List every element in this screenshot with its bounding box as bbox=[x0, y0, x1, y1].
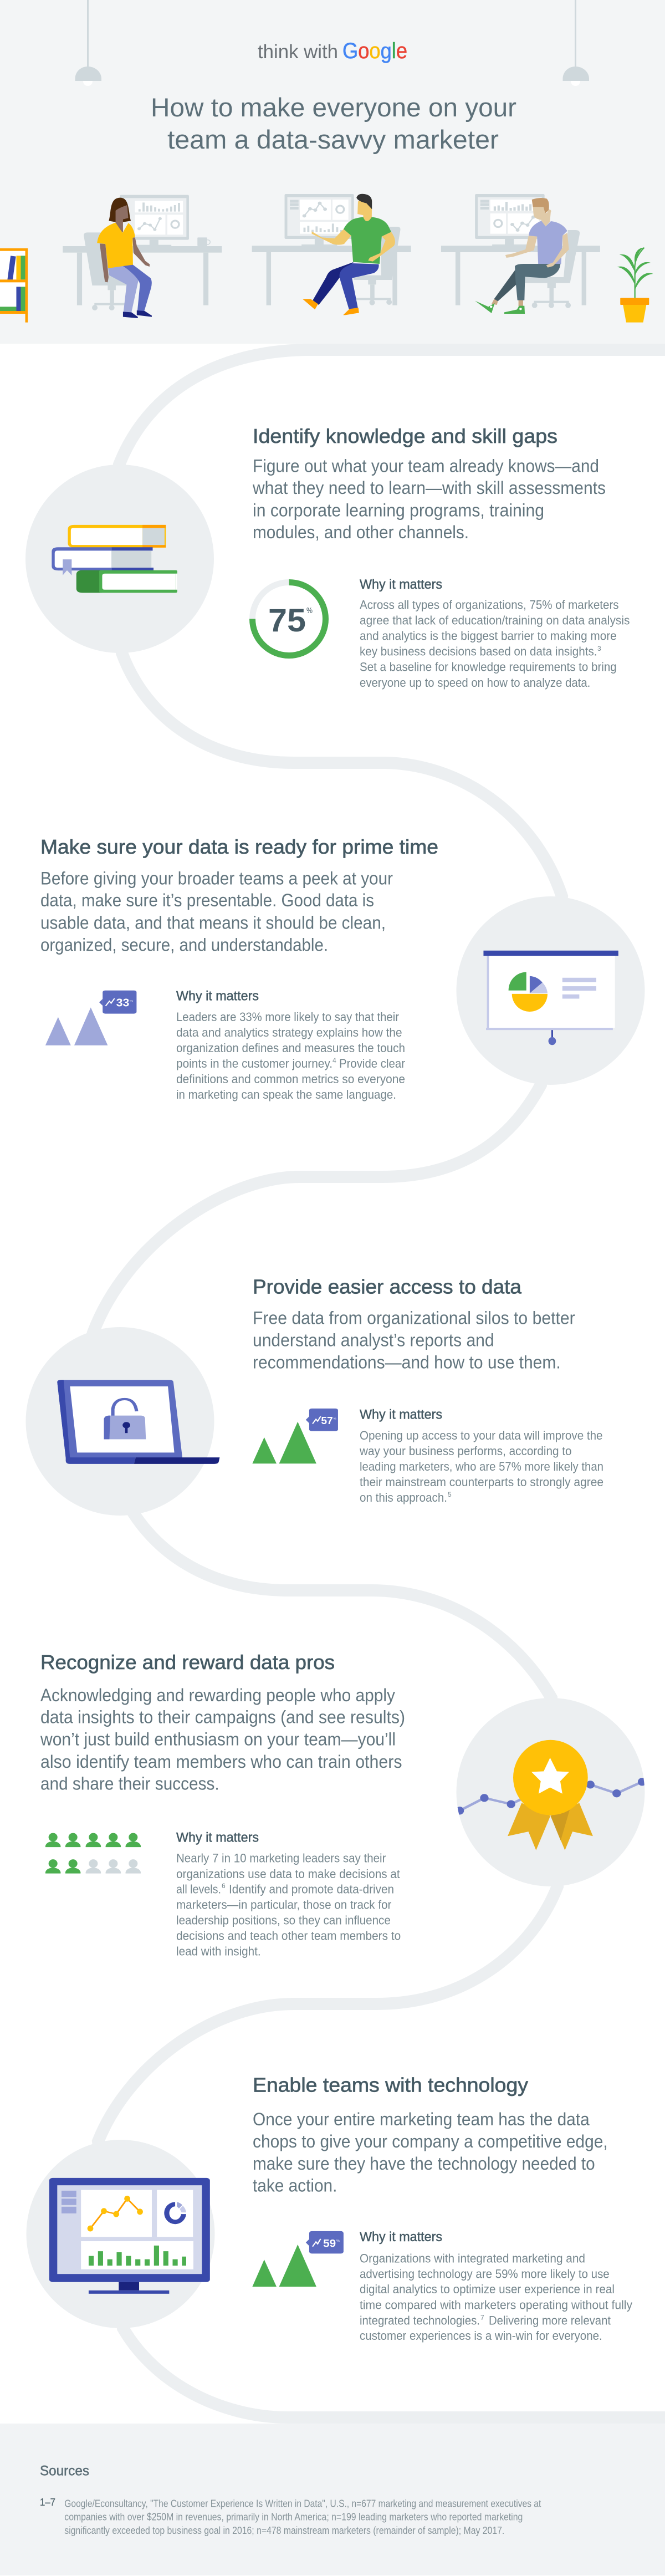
person: man in lavender shirt bbox=[475, 198, 569, 314]
why it matters: decisions and teach other team members to bbox=[176, 1929, 401, 1942]
panel: enable teams with technology bbox=[27, 2074, 632, 2343]
person: woman in yellow shirt bbox=[97, 198, 152, 318]
chart: 75% ring: 75 bbox=[268, 603, 306, 639]
why it matters: 5 bbox=[448, 1491, 452, 1498]
desk with monitor two bbox=[252, 194, 411, 305]
why it matters: 3 bbox=[597, 645, 601, 652]
illustration: right desk scenes and plant bbox=[303, 194, 653, 323]
why it matters: Across all types of organizations, 75% of marketers bbox=[360, 598, 619, 612]
text block: Free data from organizational silos to better bbox=[253, 1308, 575, 1328]
footnote text: significantly exceeded top business goal in 2016; n=478 mainstream marketers (remainder of sample); May 2017. bbox=[64, 2525, 504, 2536]
text block: Before giving your broader teams a peek at your bbox=[40, 868, 393, 888]
why it matters: Why it matters bbox=[176, 989, 259, 1004]
why it matters: Identify and promote data-driven bbox=[229, 1882, 394, 1896]
why it matters: 4 bbox=[332, 1057, 336, 1064]
chart: 7 in 10 people bbox=[45, 1833, 141, 1874]
why it matters: 6 bbox=[222, 1882, 226, 1890]
why it matters: way your business performs, according to bbox=[359, 1444, 572, 1458]
icon: potted plant bbox=[617, 248, 653, 323]
text block bbox=[253, 2109, 608, 2196]
why it matters: digital analytics to optimize user experience in real bbox=[360, 2282, 615, 2296]
text block bbox=[253, 1308, 575, 1372]
text block: take action. bbox=[253, 2176, 337, 2196]
chart: 59% peaks: % bbox=[336, 2240, 340, 2243]
icon: right hanging lamp bbox=[563, 0, 589, 86]
text block: data, make sure it’s presentable. Good data is bbox=[40, 890, 374, 910]
text block: in corporate learning programs, training bbox=[253, 500, 544, 520]
chart: 57% peaks: % bbox=[334, 1418, 336, 1420]
text block bbox=[40, 1685, 405, 1794]
text block: and share their success. bbox=[40, 1774, 219, 1794]
chart: 33% peaks: 33 bbox=[116, 997, 129, 1009]
why it matters: Why it matters bbox=[360, 577, 442, 592]
text block: make sure they have the technology needed to bbox=[253, 2154, 595, 2174]
footnote text: Google/Econsultancy, "The Customer Experience Is Written in Data", U.S., n=677 marketing and measurement executives at bbox=[64, 2498, 541, 2509]
panel: sources footer bbox=[0, 2424, 665, 2575]
icon: medal on line chart bbox=[456, 1698, 646, 1886]
text block: recommendations—and how to use them. bbox=[253, 1352, 561, 1372]
why it matters: data and analytics strategy explains how the bbox=[176, 1026, 402, 1039]
why it matters: Why it matters bbox=[360, 1407, 442, 1422]
icon: presentation board bbox=[457, 896, 645, 1085]
header panel bbox=[0, 0, 665, 344]
desk with monitor three bbox=[441, 194, 600, 308]
why it matters: and analytics is the biggest barrier to making more bbox=[360, 629, 617, 643]
why it matters: customer experiences is a win-win for everyone. bbox=[360, 2329, 602, 2343]
why it matters: marketers—in particular, those on track for bbox=[176, 1897, 391, 1911]
desk with monitor one bbox=[63, 195, 222, 310]
chart: 57% peaks: 57 bbox=[321, 1415, 333, 1426]
why it matters: leadership positions, so they can influence bbox=[176, 1913, 391, 1927]
why it matters: everyone up to speed on how to analyze data. bbox=[360, 676, 590, 690]
why it matters bbox=[176, 1830, 401, 1958]
why it matters: organization defines and measures the touch bbox=[176, 1041, 405, 1055]
why it matters bbox=[360, 2230, 632, 2343]
icon: stacked books bbox=[25, 465, 214, 653]
panel: make sure your data is ready bbox=[40, 835, 645, 1101]
why it matters: Provide clear bbox=[339, 1057, 405, 1070]
why it matters: agree that lack of education/training on data analysis bbox=[360, 613, 630, 628]
text block: data insights to their campaigns (and see results) bbox=[40, 1707, 405, 1727]
why it matters: on this approach. bbox=[360, 1491, 447, 1504]
logo: think with Google: Google bbox=[342, 39, 407, 63]
why it matters bbox=[360, 577, 630, 690]
illustration: left desk scene and bookshelf bbox=[0, 194, 411, 323]
title: team a data-savvy marketer bbox=[167, 125, 499, 154]
why it matters: leading marketers, who are 57% more likely than bbox=[360, 1460, 603, 1473]
icon: left hanging lamp bbox=[75, 0, 101, 86]
title bbox=[151, 93, 516, 154]
why it matters bbox=[359, 1407, 603, 1504]
text block: understand analyst’s reports and bbox=[253, 1330, 494, 1350]
why it matters: Delivering more relevant bbox=[489, 2313, 611, 2327]
why it matters: key business decisions based on data insights. bbox=[360, 645, 597, 659]
why it matters: all levels. bbox=[176, 1882, 221, 1896]
chart: 59% peaks: 59 bbox=[323, 2238, 336, 2249]
text block: chops to give your company a competitive edge, bbox=[253, 2131, 608, 2151]
why it matters: their mainstream counterparts to strongly agree bbox=[360, 1475, 603, 1489]
why it matters: Organizations with integrated marketing and bbox=[360, 2252, 585, 2266]
heading: Identify knowledge and skill gaps bbox=[253, 425, 557, 447]
heading: Enable teams with technology bbox=[253, 2074, 528, 2096]
heading: sources: Sources bbox=[40, 2463, 89, 2479]
chart: 75% ring: % bbox=[306, 606, 313, 615]
why it matters bbox=[176, 989, 405, 1101]
text block: Acknowledging and rewarding people who apply bbox=[40, 1685, 395, 1705]
logo: think with Google: think with bbox=[258, 41, 338, 63]
person: man in green shirt bbox=[303, 194, 395, 315]
footnote text: companies with over $250M in revenues, primarily in North America; n=199 leading marketers who reported marketing bbox=[64, 2512, 523, 2523]
heading: Make sure your data is ready for prime time bbox=[40, 835, 438, 858]
text block bbox=[252, 456, 606, 542]
why it matters: organizations use data to make decisions at bbox=[176, 1867, 400, 1881]
logo: think with Google bbox=[258, 39, 407, 63]
why it matters: points in the customer journey. bbox=[176, 1057, 332, 1070]
text block: also identify team members who can train others bbox=[40, 1752, 402, 1772]
chart: 33% peaks: % bbox=[130, 1000, 133, 1003]
why it matters: integrated technologies. bbox=[360, 2313, 480, 2327]
text block: what they need to learn—with skill assessments bbox=[252, 478, 606, 498]
connecting curved path bbox=[93, 350, 665, 2417]
text block: Once your entire marketing team has the data bbox=[253, 2109, 590, 2129]
footnote text bbox=[64, 2498, 541, 2536]
why it matters: Opening up access to your data will improve the bbox=[360, 1429, 603, 1442]
panel: identify knowledge and skill gaps bbox=[25, 425, 630, 690]
title: How to make everyone on your bbox=[151, 93, 516, 122]
text block bbox=[40, 868, 393, 955]
heading: Provide easier access to data bbox=[253, 1276, 522, 1298]
text block: Figure out what your team already knows—and bbox=[253, 456, 599, 476]
chart: 33% peaks bbox=[45, 991, 136, 1045]
chair and desk side for man two bbox=[332, 227, 411, 305]
why it matters: Set a baseline for knowledge requirements to bring bbox=[360, 660, 617, 674]
text block: organized, secure, and understandable. bbox=[40, 935, 328, 955]
text block: modules, and other channels. bbox=[253, 522, 469, 542]
why it matters: 7 bbox=[480, 2314, 484, 2322]
icon: desktop dashboard bbox=[27, 2140, 215, 2328]
text block: usable data, and that means it should be clean, bbox=[40, 912, 386, 932]
why it matters: Nearly 7 in 10 marketing leaders say their bbox=[176, 1851, 386, 1865]
panel: provide easier access to data bbox=[25, 1276, 603, 1516]
panel: recognize and reward data pros bbox=[40, 1651, 646, 1958]
heading: Recognize and reward data pros bbox=[40, 1651, 335, 1674]
text block: won’t just build enthusiasm on your team—you’ll bbox=[40, 1730, 396, 1749]
icon: laptop with padlock bbox=[25, 1327, 219, 1516]
why it matters: in marketing can speak the same language. bbox=[176, 1088, 396, 1101]
why it matters: advertising technology are 59% more likely to use bbox=[360, 2267, 610, 2281]
why it matters: Leaders are 33% more likely to say that their bbox=[176, 1010, 399, 1024]
why it matters: time compared with marketers operating without fully bbox=[360, 2298, 632, 2312]
why it matters: Why it matters bbox=[360, 2230, 442, 2245]
why it matters: lead with insight. bbox=[176, 1945, 261, 1958]
chart: 59% peaks bbox=[252, 2231, 344, 2287]
chart: 75% ring bbox=[253, 582, 326, 655]
icon: bookshelf bbox=[0, 248, 28, 323]
why it matters: definitions and common metrics so everyone bbox=[176, 1072, 405, 1086]
chart: 57% peaks bbox=[252, 1409, 338, 1463]
footnote number: 1–7 bbox=[40, 2497, 55, 2508]
why it matters: Why it matters bbox=[176, 1830, 259, 1845]
